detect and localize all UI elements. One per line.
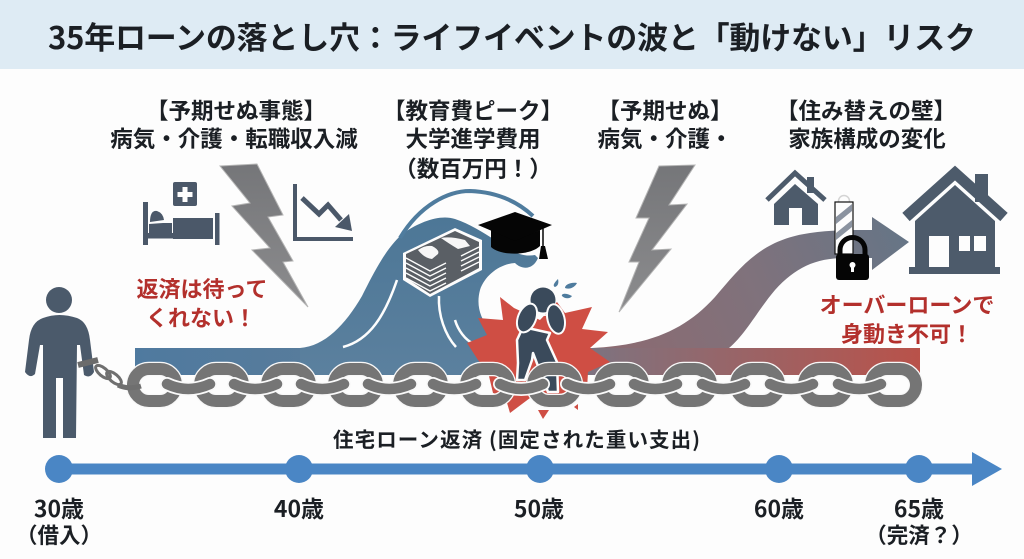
age label 65	[865, 490, 973, 550]
chain	[133, 369, 916, 401]
title: 35年ローンの落とし穴：ライフイベントの波と「動けない」リスク	[48, 13, 976, 58]
icon: right lightning bolt	[619, 165, 695, 312]
warning: overloan: 身動き不可！	[841, 317, 973, 349]
age label 30: （借入）	[16, 519, 102, 550]
wave	[300, 191, 538, 375]
age label 50: 50歳	[514, 490, 564, 524]
age label 30: 30歳	[34, 490, 84, 524]
timeline dot 60	[765, 455, 793, 483]
event label: unexpected second: 病気・介護・	[597, 122, 733, 154]
money stack	[403, 228, 482, 297]
warning: repayment does not wait: 返済は待って	[137, 272, 267, 304]
payment burden band	[135, 348, 920, 375]
timeline arrowhead	[972, 452, 1002, 486]
warning: repayment does not wait: くれない！	[146, 301, 256, 333]
age label 60: 60歳	[754, 490, 804, 524]
burst: impact	[467, 297, 610, 413]
timeline dot 50	[526, 455, 554, 483]
event label: moving barrier: 家族構成の変化	[788, 122, 946, 154]
age label 30	[16, 490, 102, 550]
header band	[0, 0, 1024, 69]
icon: large house	[906, 173, 1004, 274]
event label: unexpected situation: 病気・介護・転職収入減	[110, 122, 358, 154]
chain caption: 住宅ローン返済 (固定された重い支出)	[333, 423, 700, 453]
timeline dot 65	[905, 455, 933, 483]
icon: hospital bed	[143, 182, 220, 245]
event label: unexpected second	[597, 94, 733, 154]
age label 65: 65歳	[894, 490, 944, 524]
icon: curved rising arrow	[592, 217, 909, 348]
event label: education cost peak	[383, 94, 563, 184]
warning: overloan: オーバーローンで	[820, 288, 994, 320]
icon: padlock	[836, 238, 869, 280]
burst shards	[538, 404, 578, 419]
shackled person	[25, 287, 141, 438]
scared person	[513, 279, 577, 392]
icon: left lightning bolt	[220, 164, 308, 307]
event label: education cost peak: 大学進学費用	[405, 122, 541, 154]
timeline dot 30	[45, 455, 73, 483]
age label 40: 40歳	[274, 490, 324, 524]
event label: education cost peak: （数百万円！）	[394, 152, 552, 184]
icon: graduation cap	[478, 212, 552, 259]
event label: education cost peak: 【教育費ピーク】	[383, 94, 563, 126]
event label: unexpected situation	[110, 94, 358, 154]
age label 65: （完済？）	[865, 519, 973, 550]
warning: repayment does not wait	[137, 272, 267, 333]
timeline	[45, 452, 1002, 486]
event label: moving barrier	[776, 94, 956, 154]
event label: unexpected second: 【予期せぬ】	[597, 94, 733, 126]
icon: small house	[767, 173, 825, 225]
event label: unexpected situation: 【予期せぬ事態】	[146, 94, 326, 126]
warning: overloan	[820, 288, 994, 349]
event label: moving barrier: 【住み替えの壁】	[776, 94, 956, 126]
timeline dot 40	[285, 455, 313, 483]
icon: falling income chart	[295, 184, 353, 239]
icon: blocking barrier	[835, 196, 853, 254]
